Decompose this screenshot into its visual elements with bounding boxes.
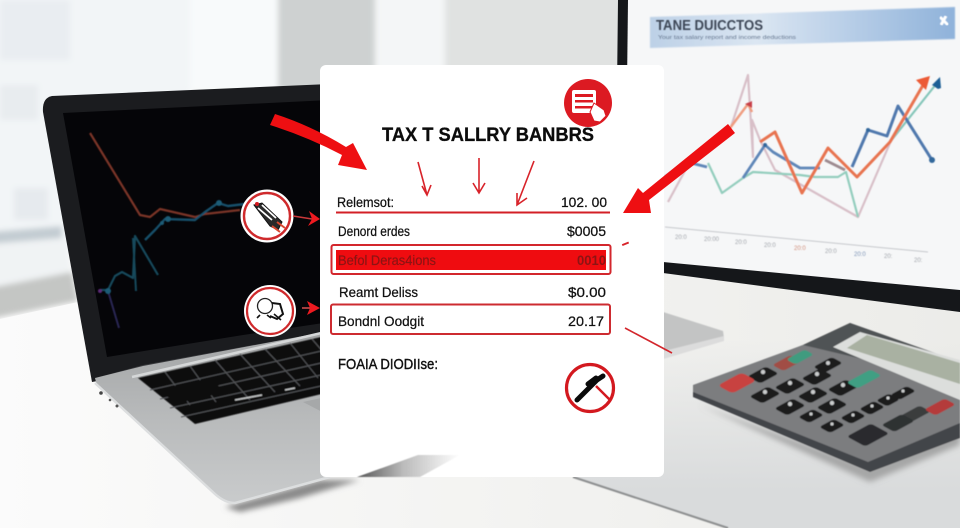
- highlighted red row: Befol Deras4ions: [338, 252, 436, 268]
- soft shadow under laptop and card: [225, 480, 360, 512]
- monitor axis labels: 20:0: [854, 252, 866, 258]
- monitor axis labels: 20:0: [794, 246, 806, 252]
- laptop: [43, 84, 330, 503]
- monitor axis labels: 20:0: [825, 249, 837, 255]
- highlighted red row: [332, 245, 610, 274]
- calculator: [693, 323, 960, 482]
- laptop screen chart: [90, 133, 245, 328]
- laptop lid: [43, 84, 330, 382]
- white salary card: [320, 65, 664, 477]
- row: second amount: $0005: [567, 223, 606, 239]
- laptop keyboard: [138, 335, 330, 424]
- row: first amount: Relemsot:: [337, 194, 394, 210]
- monitor axis labels: 20:0: [675, 235, 687, 241]
- calculator display: [833, 332, 960, 400]
- icon: prohibited magnifier badge: [244, 285, 296, 337]
- monitor line chart: [665, 75, 941, 252]
- monitor banner: Your tax salary report and income deductions: [658, 35, 797, 41]
- monitor axis labels: 20:: [914, 258, 923, 264]
- thin red pointer line: [625, 328, 672, 353]
- arrow from pen badge to card: [293, 211, 320, 226]
- torn shadow at card bottom: [357, 455, 460, 477]
- row: first amount: 102. 00: [561, 194, 607, 210]
- monitor banner: [650, 7, 955, 48]
- monitor banner: TANE DUICCTOS: [656, 18, 763, 34]
- thin red arrows over the first row: [418, 158, 534, 205]
- calculator keys: [718, 350, 956, 446]
- monitor axis labels: 20:: [884, 254, 893, 260]
- row: second amount: [338, 223, 606, 239]
- icon: prohibited tool: [566, 364, 614, 412]
- arrow from magnifier badge to card: [302, 301, 320, 315]
- row: third amount: $0.00: [568, 284, 606, 300]
- highlighted red row: 0010: [577, 252, 606, 268]
- paper sheet under calculator: [573, 340, 960, 528]
- outlined row: 20.17: [568, 313, 604, 329]
- monitor axis labels: 20:00: [704, 237, 720, 243]
- outlined row: Bondnl Oodgit: [338, 313, 424, 329]
- row: second amount: Denord erdes: [338, 223, 410, 239]
- row: third amount: [339, 284, 606, 300]
- total label: FOAIA DIODIIse:: [338, 357, 438, 373]
- big red arrow from upper right: [623, 124, 735, 213]
- laptop base: [95, 331, 330, 503]
- laptop or stand corner right of card: [660, 311, 724, 360]
- monitor axis labels: 20:0: [735, 240, 747, 246]
- card heading: TAX T SALLRY BANBRS: [382, 125, 594, 146]
- outlined row: [331, 304, 610, 334]
- calculator key symbols: [761, 361, 905, 426]
- external monitor: [615, 0, 960, 312]
- row: first amount: [336, 194, 610, 214]
- icon: prohibited pen badge: [240, 190, 294, 242]
- row: third amount: Reamt Deliss: [339, 284, 418, 300]
- small red dash: [622, 242, 629, 246]
- icon: red document badge: [564, 79, 612, 127]
- big red arrow from upper left: [270, 114, 367, 170]
- monitor axis labels: [675, 235, 923, 264]
- monitor axis labels: 20:0: [764, 243, 776, 249]
